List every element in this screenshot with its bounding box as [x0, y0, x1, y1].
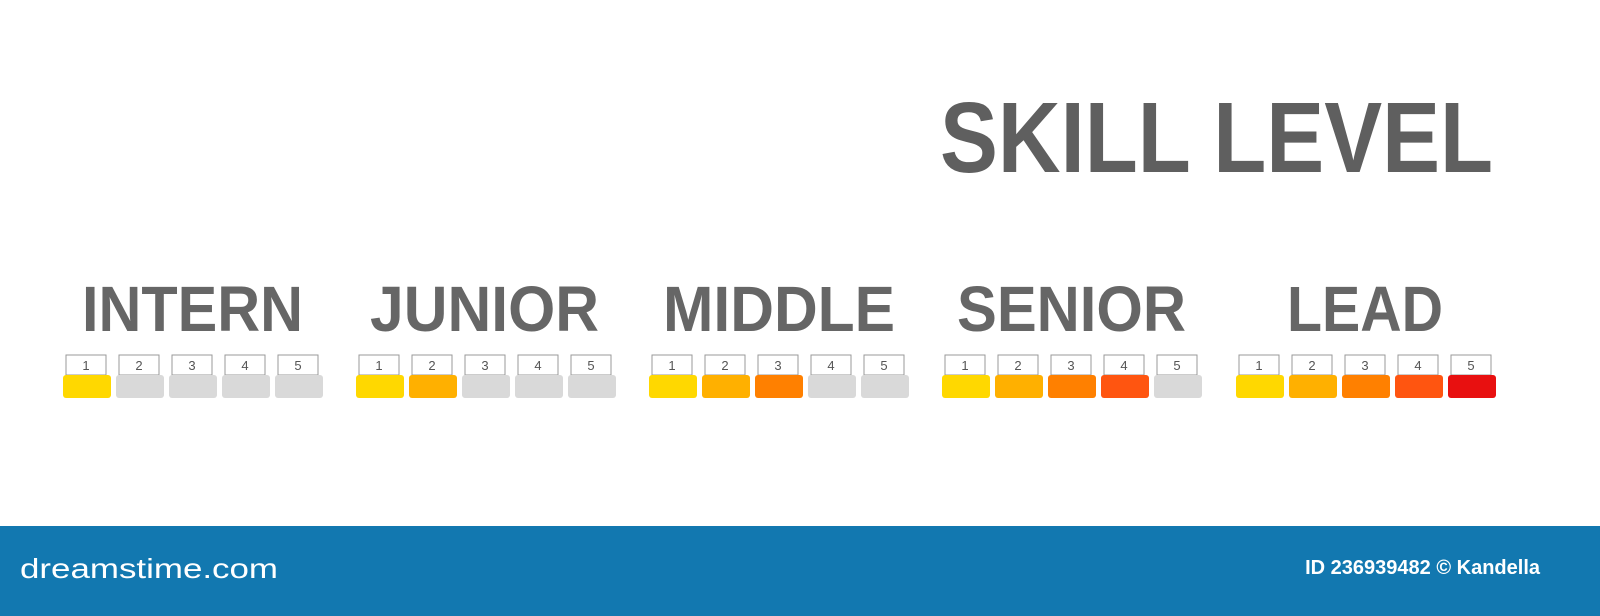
- panel: intern: [63, 273, 323, 398]
- panel: intern: INTERN: [82, 273, 303, 345]
- panel: middle: 4: [827, 358, 835, 373]
- panel: intern: 1: [82, 358, 90, 373]
- panel: lead: 2: [1308, 358, 1316, 373]
- panel: middle: 5: [880, 358, 888, 373]
- panel: junior: 4: [534, 358, 542, 373]
- panel: junior: [356, 273, 616, 398]
- panel: junior: JUNIOR: [370, 273, 599, 345]
- panel: intern: 4: [241, 358, 249, 373]
- panel: lead: 4: [1414, 358, 1422, 373]
- panel: middle: MIDDLE: [663, 273, 895, 345]
- panel: intern: 2: [135, 358, 143, 373]
- panel: senior: 3: [1067, 358, 1075, 373]
- panel: senior: SENIOR: [957, 273, 1186, 345]
- panel: lead: 5: [1467, 358, 1475, 373]
- footer bar: dreamstime.com: [20, 553, 278, 584]
- panel: senior: 4: [1120, 358, 1128, 373]
- panel: lead: [1236, 273, 1496, 398]
- panel: middle: [649, 273, 909, 398]
- panel: lead: 3: [1361, 358, 1369, 373]
- panel: lead: LEAD: [1287, 273, 1443, 345]
- panel: middle: 1: [668, 358, 676, 373]
- panel: middle: 3: [774, 358, 782, 373]
- panel: junior: 2: [428, 358, 436, 373]
- title: SKILL LEVEL: [940, 82, 1493, 194]
- panel: junior: 5: [587, 358, 595, 373]
- panel: intern: 3: [188, 358, 196, 373]
- panel: lead: 1: [1255, 358, 1263, 373]
- panel: senior: 2: [1014, 358, 1022, 373]
- panel: senior: 5: [1173, 358, 1181, 373]
- panel: middle: 2: [721, 358, 729, 373]
- panel: junior: 1: [375, 358, 383, 373]
- footer bar: [0, 526, 1600, 616]
- panel: junior: 3: [481, 358, 489, 373]
- panel: intern: 5: [294, 358, 302, 373]
- footer bar: ID 236939482 © Kandella: [1305, 557, 1541, 579]
- panel: senior: 1: [961, 358, 969, 373]
- panel: senior: [942, 273, 1202, 398]
